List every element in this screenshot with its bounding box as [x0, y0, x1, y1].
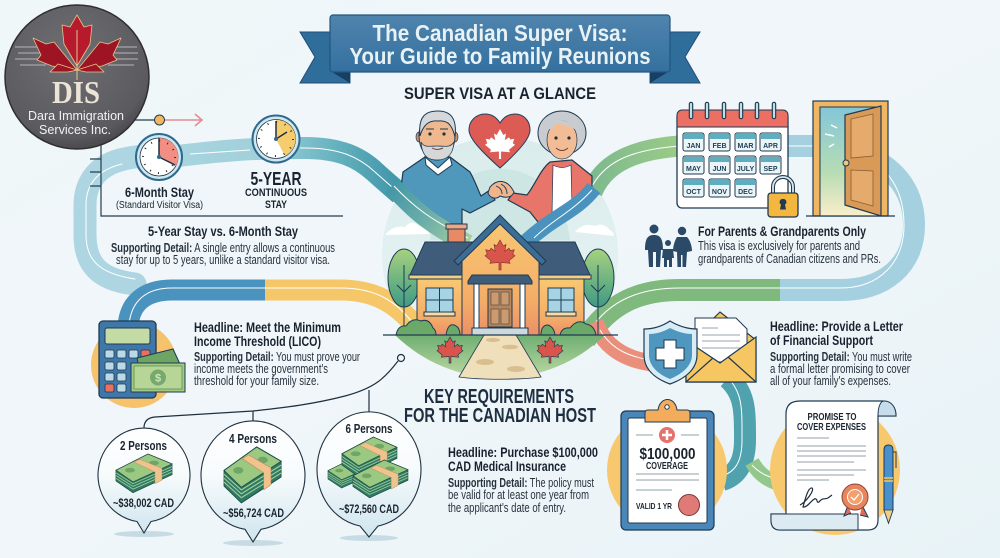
callout: 6 persons: [317, 412, 421, 541]
callout: 6 persons: 6 Persons: [346, 421, 392, 436]
icon: 5-year clock: [252, 116, 300, 162]
text block: income threshold: [194, 319, 360, 388]
icon: insurance clipboard: COVERAGE: [646, 461, 688, 472]
icon: open door: [806, 101, 895, 216]
title banner: [300, 15, 700, 83]
text block: letter of financial support: [770, 318, 912, 388]
callout: 2 persons: ~$38,002 CAD: [113, 496, 174, 510]
logo: Dara Immigration Services: Services Inc.: [39, 123, 111, 137]
text block: income threshold: threshold for your family size.: [194, 374, 319, 388]
icon: family: [645, 224, 692, 267]
labels: 6-month stay: (Standard Visitor Visa): [116, 200, 203, 211]
text block: income threshold: income meets the government's: [194, 362, 328, 376]
text block: income threshold: Headline: Meet the Minimum: [194, 319, 341, 335]
section heading: key requirements: KEY REQUIREMENTS: [424, 386, 574, 408]
icon: locked calendar: NOV: [712, 189, 727, 196]
icon: locked calendar: JULY: [737, 166, 754, 173]
icon: locked calendar: FEB: [712, 143, 726, 150]
text block: letter of financial support: Headline: Provide a Letter: [770, 318, 903, 334]
icon: locked calendar: OCT: [686, 189, 702, 196]
text block: 5-year vs 6-month: [111, 223, 335, 267]
icon: locked calendar: [677, 104, 798, 217]
text block: medical insurance: Headline: Purchase $100,000: [448, 444, 598, 460]
labels: 6-month stay: [116, 184, 203, 211]
icon: insurance clipboard: $100,000: [640, 446, 696, 463]
illustration: house: [383, 215, 618, 379]
icon: 6-month clock: [136, 134, 182, 180]
text block: parents and grandparents only: For Parents & Grandparents Only: [698, 223, 866, 239]
icon: locked calendar: APR: [763, 143, 778, 150]
central scene: couple and house: [383, 111, 618, 379]
text block: parents and grandparents only: [698, 223, 881, 266]
text block: medical insurance: the applicant's date of entry.: [448, 501, 566, 515]
icon: calculator and cash: $: [155, 372, 161, 384]
section heading: super visa at a glance: SUPER VISA AT A GLANCE: [404, 84, 596, 103]
icon: insurance clipboard: VALID 1 YR: [636, 501, 672, 511]
callout: 4 persons: [201, 421, 305, 546]
icon: heart with maple leaf: [469, 114, 530, 168]
icon: locked calendar: SEP: [763, 166, 778, 173]
icon: locked calendar: JUN: [712, 166, 727, 173]
text block: medical insurance: [448, 444, 598, 515]
text block: 5-year vs 6-month: Supporting Detail: A single entry allows a continuous: [111, 241, 335, 255]
title banner: The Canadian Super Visa:: [372, 20, 628, 46]
text block: medical insurance: Supporting Detail: The policy must: [448, 476, 594, 490]
text block: medical insurance: CAD Medical Insurance: [448, 458, 566, 474]
icon: locked calendar: MAR: [738, 143, 753, 150]
title banner: Your Guide to Family Reunions: [350, 43, 650, 69]
connector to income bubbles: [144, 354, 404, 428]
labels: 5-year continuous stay: CONTINUOUS: [245, 187, 307, 199]
text block: income threshold: Supporting Detail: You must prove your: [194, 350, 360, 364]
labels: 5-year continuous stay: [245, 169, 307, 211]
icon: promise scroll with seal and pen: [770, 401, 900, 535]
icon: promise scroll with seal and pen: PROMISE TO: [808, 412, 857, 423]
bracket lines for stay comparison: [90, 145, 343, 216]
labels: 6-month stay: 6-Month Stay: [125, 184, 194, 200]
text block: 5-year vs 6-month: stay for up to 5 years, unlike a standard visitor visa.: [116, 253, 330, 267]
logo: Dara Immigration Services: Dara Immigration: [28, 109, 124, 123]
illustration: grandfather: [400, 111, 495, 224]
callout: 4 persons: ~$56,724 CAD: [223, 506, 284, 520]
text block: letter of financial support: all of your family's expenses.: [770, 374, 891, 388]
labels: 5-year continuous stay: STAY: [265, 199, 288, 211]
logo: Dara Immigration Services: [5, 5, 149, 149]
icon: clasped hands: [488, 181, 514, 198]
icon: calculator and cash: [91, 321, 185, 408]
text block: 5-year vs 6-month: 5-Year Stay vs. 6-Month Stay: [148, 223, 298, 239]
icon: locked calendar: JAN: [686, 143, 701, 150]
text block: medical insurance: be valid for at least one year from: [448, 488, 589, 502]
section heading: key requirements: [404, 386, 596, 427]
icon: locked calendar: MAY: [686, 166, 701, 173]
labels: 5-year continuous stay: 5-YEAR: [250, 169, 302, 189]
text block: parents and grandparents only: This visa is exclusively for parents and: [698, 239, 860, 253]
icon: insurance clipboard: [607, 400, 727, 530]
text block: letter of financial support: of Financial Support: [770, 332, 873, 348]
connecting journey bands: [85, 146, 914, 486]
callout: 2 persons: [98, 428, 190, 537]
callout: 4 persons: 4 Persons: [229, 431, 277, 446]
icon: promise scroll with seal and pen: COVER EXPENSES: [797, 422, 866, 433]
text block: letter of financial support: Supporting Detail: You must write: [770, 350, 912, 364]
callout: 2 persons: 2 Persons: [120, 438, 167, 453]
text block: parents and grandparents only: grandparents of Canadian citizens and PRs.: [698, 252, 881, 266]
text block: letter of financial support: a formal letter promising to cover: [770, 362, 910, 376]
callout: 6 persons: ~$72,560 CAD: [339, 502, 399, 516]
arrow from logo: [135, 114, 202, 126]
logo: Dara Immigration Services: DIS: [52, 74, 100, 110]
illustration: grandmother: [508, 111, 592, 222]
icon: shield and envelope: [644, 312, 756, 384]
text block: income threshold: Income Threshold (LICO): [194, 333, 321, 349]
pale dome behind the central scene: [382, 140, 618, 310]
icon: locked calendar: DEC: [738, 189, 753, 196]
section heading: key requirements: FOR THE CANADIAN HOST: [404, 405, 596, 427]
